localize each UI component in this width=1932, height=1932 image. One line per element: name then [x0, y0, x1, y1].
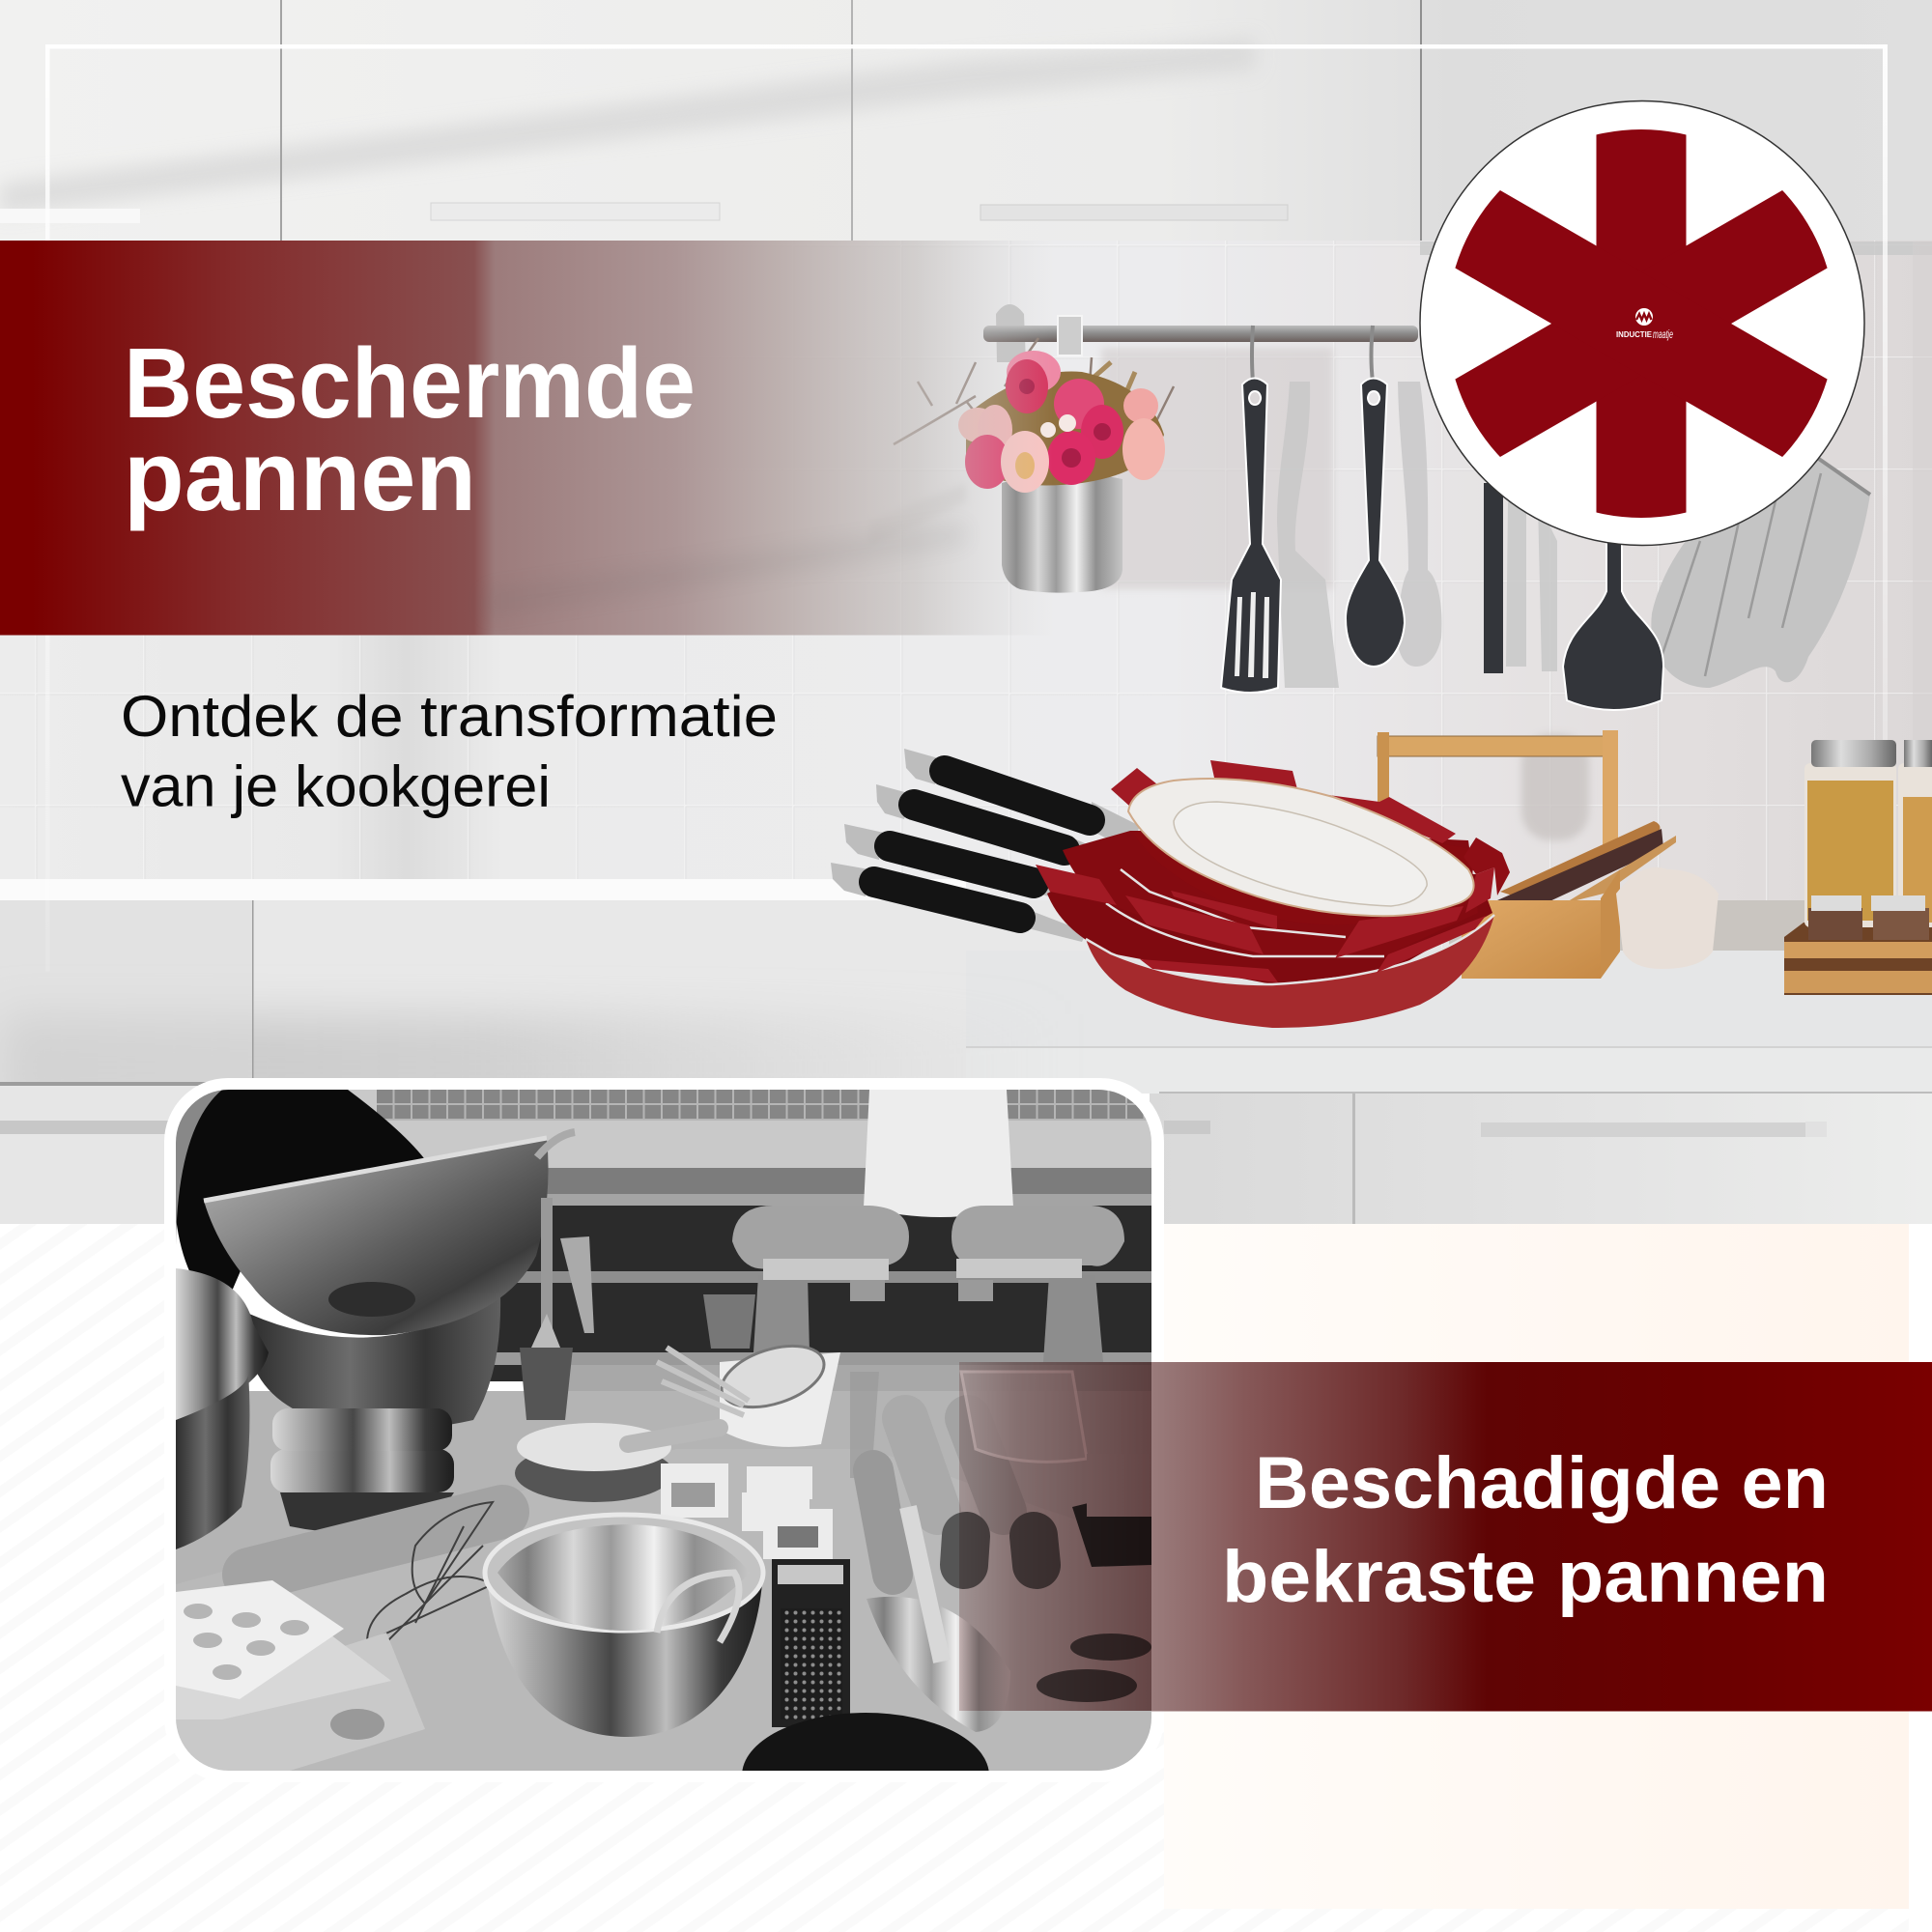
turner [1563, 531, 1663, 710]
measuring cup [961, 1372, 1087, 1462]
serving spoon [867, 1597, 1010, 1732]
brand logo [1616, 308, 1673, 341]
whisks [367, 1502, 493, 1642]
stacked pans with felt protectors [831, 749, 1510, 1028]
wooden rolling pin [249, 1512, 502, 1575]
cream panel [1164, 1224, 1909, 1909]
tiled wall [0, 241, 1932, 955]
farfalle jar [1898, 740, 1932, 927]
white circle [1420, 100, 1864, 545]
bottom pan body [1086, 915, 1494, 1028]
wooden spoons [1497, 821, 1676, 903]
big black pot [176, 1090, 424, 1290]
box grater [772, 1559, 850, 1727]
chef hat [864, 1090, 1013, 1217]
upper title band [0, 241, 1053, 636]
black handles [831, 749, 1140, 942]
tray [1784, 923, 1932, 995]
dried twigs [894, 338, 1174, 444]
band overlay on photo [959, 1362, 1151, 1711]
left pot stack [176, 1268, 269, 1549]
roses [958, 351, 1165, 493]
spoon [1346, 379, 1405, 667]
title: Beschermde pannen: pannen [124, 420, 476, 531]
felt pads [1036, 760, 1510, 982]
spice jars [1808, 895, 1929, 940]
ceramic bowl [1616, 867, 1719, 969]
pan rims [1086, 869, 1494, 984]
pan 2 interior [1063, 831, 1478, 956]
photo frame: damaged cookware [164, 1078, 1164, 1838]
title: Beschadigde en bekraste pannen [1222, 1442, 1829, 1618]
top pan wall [1133, 811, 1478, 925]
sweet potatoes [1037, 1634, 1151, 1702]
title: Beschadigde en bekraste pannen: bekraste pannen [1222, 1536, 1829, 1618]
foliage [966, 372, 1164, 485]
dark ramekins [1072, 1454, 1151, 1567]
kitchen scene background [0, 0, 1932, 1224]
marble table [176, 1391, 1151, 1584]
dark wok [742, 1713, 989, 1838]
muffin trays [176, 1580, 425, 1771]
subtitle: van je kookgerei [121, 753, 551, 819]
oven mitt [1651, 457, 1870, 688]
plate stack [515, 1423, 673, 1502]
subtitle [121, 684, 778, 819]
rolling pin bundle [873, 1418, 1037, 1575]
shelf bowls [703, 1294, 755, 1349]
steel mixing bowl [485, 1515, 763, 1737]
fusilli jar [1804, 740, 1896, 927]
wooden caddy [1378, 730, 1676, 979]
upper cabinets [0, 0, 1932, 242]
white counter edge [0, 879, 966, 900]
brand logo: maatje [1653, 327, 1673, 341]
utensil rail [983, 304, 1418, 382]
white plate [1128, 779, 1474, 916]
lower cabinets [0, 1086, 1932, 1224]
subtitle: Ontdek de transformatie [121, 684, 778, 749]
slotted spatula [1221, 379, 1281, 693]
flower pot [894, 338, 1174, 593]
thin white frame [45, 44, 1888, 972]
countertop [0, 900, 1932, 1094]
brand logo: INDUCTIE [1616, 329, 1652, 339]
hanging utensils [1221, 379, 1663, 710]
stand mixers [732, 1206, 1124, 1362]
white cutters [661, 1463, 833, 1559]
steel stockpot [204, 1132, 575, 1430]
tong handle [1484, 483, 1503, 673]
title: Beschermde pannen [124, 327, 696, 531]
lower title band [1151, 1362, 1932, 1712]
steel pot [1002, 473, 1122, 593]
utensil shadows [1277, 382, 1557, 688]
protector badge [1420, 100, 1864, 545]
white bowl with sticks [628, 1334, 879, 1478]
back wall and shelving [348, 1090, 1151, 1391]
pan 3 interior [1047, 869, 1492, 984]
small steel pans [270, 1408, 454, 1532]
black and white kitchen photo [176, 1090, 1151, 1838]
title: Beschadigde en bekraste pannen: Beschadigde en [1255, 1442, 1829, 1524]
pasta jars [1784, 740, 1932, 995]
title: Beschermde pannen: Beschermde [124, 327, 696, 439]
red felt star [1447, 126, 1835, 522]
mortar and stand [520, 1198, 594, 1420]
